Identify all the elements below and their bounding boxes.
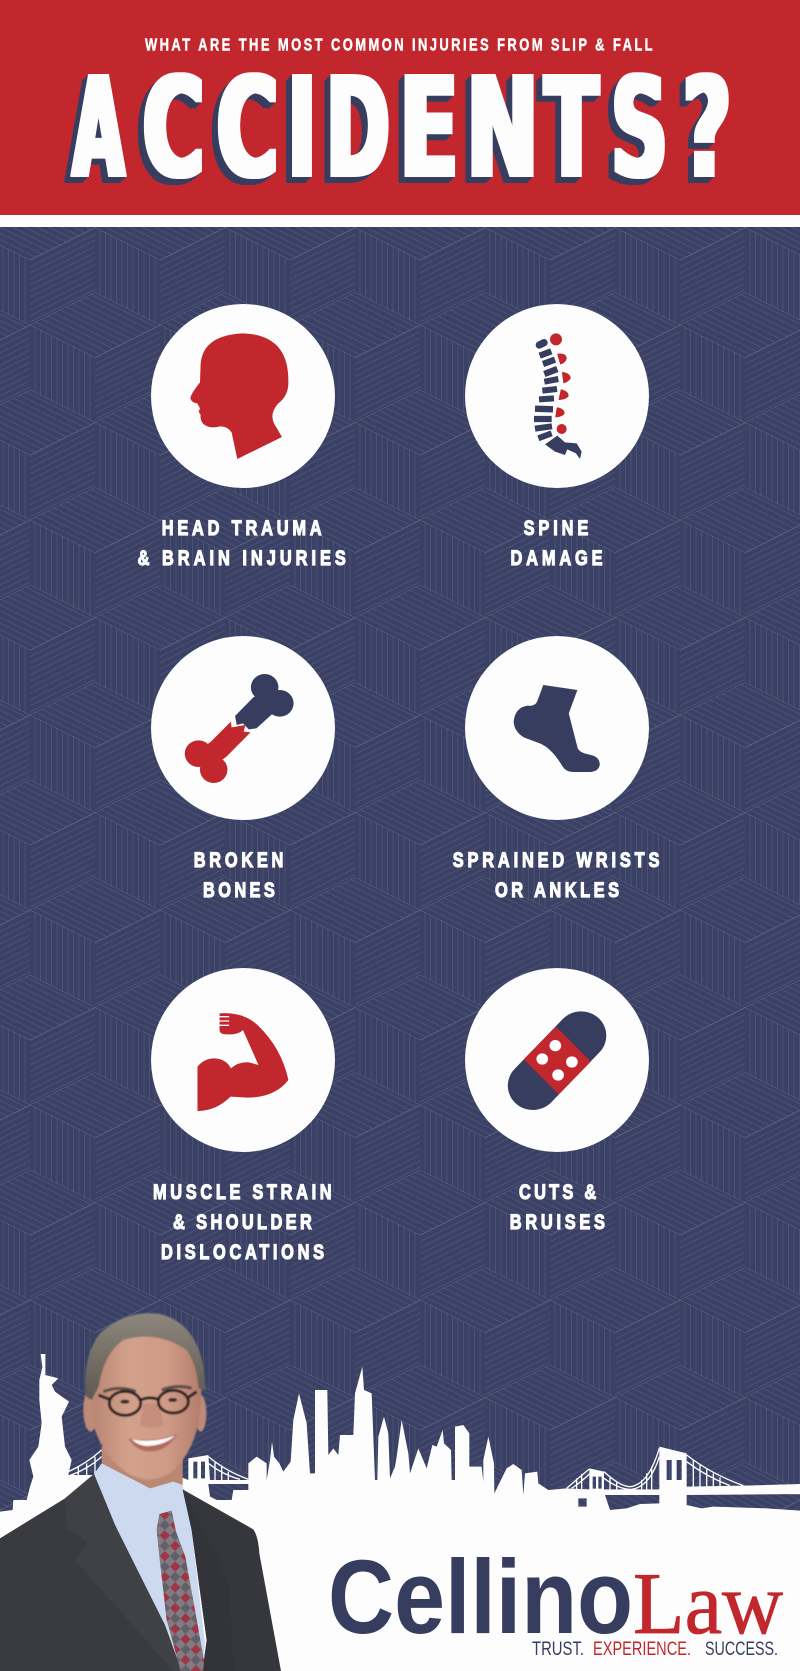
title: accidents: I [288, 49, 316, 210]
label: OR ANKLES [495, 878, 619, 901]
glasses [98, 1390, 197, 1415]
tagline: SUCCESS. [705, 1639, 778, 1660]
icon: flexed arm [198, 1013, 288, 1111]
title: accidents: E [400, 49, 458, 210]
smile [128, 1434, 177, 1451]
label: CUTS & [519, 1180, 597, 1203]
icon: broken bone [185, 674, 294, 783]
panel: cuts and bruises [465, 968, 649, 1233]
panel: head trauma [138, 304, 346, 569]
eyebrows [103, 1387, 192, 1392]
label: BROKEN [194, 848, 283, 871]
label [153, 1180, 332, 1263]
title: accidents: D [326, 48, 390, 209]
label: & BRAIN INJURIES [138, 546, 346, 569]
panel: broken bones [151, 636, 335, 901]
logo: cellino law [328, 1539, 783, 1660]
portrait of attorney [0, 1313, 281, 1671]
label [510, 1180, 605, 1233]
subtitle: WHAT ARE THE MOST COMMON INJURIES FROM SLIP & FALL [145, 36, 653, 55]
wordmark: cellino: Cellino [328, 1539, 633, 1656]
title: accidents: C [143, 49, 204, 210]
new york skyline silhouette [0, 1354, 800, 1671]
head [83, 1313, 206, 1480]
label [194, 848, 283, 901]
label: MUSCLE STRAIN [153, 1180, 332, 1203]
title: accidents [73, 47, 731, 210]
label [510, 516, 603, 569]
panel: sprained wrists or ankles [453, 636, 659, 901]
suit jacket [0, 1474, 281, 1671]
bridge cables [68, 1448, 743, 1489]
label [453, 848, 659, 901]
panel: spine damage [465, 304, 649, 569]
icon: bandage [524, 1027, 591, 1094]
title: accidents: ? [683, 47, 731, 209]
label: DISLOCATIONS [161, 1240, 324, 1263]
label: BRUISES [510, 1210, 605, 1233]
necktie [157, 1511, 204, 1671]
title: accidents: T [545, 48, 598, 209]
label: BONES [203, 878, 275, 901]
panel: muscle strain and shoulder dislocations [151, 968, 335, 1263]
title: accidents: A [73, 47, 124, 209]
icon: spine [534, 334, 582, 459]
label: HEAD TRAUMA [162, 516, 322, 539]
tagline: EXPERIENCE. [593, 1639, 691, 1660]
label [138, 516, 346, 569]
hair [85, 1313, 206, 1400]
eyes [120, 1398, 177, 1404]
title: accidents: C [217, 49, 278, 210]
label: DAMAGE [510, 546, 603, 569]
icon: head [190, 333, 288, 459]
label: & SHOULDER [173, 1210, 312, 1233]
neck [102, 1447, 183, 1493]
shirt [94, 1463, 205, 1671]
tagline: TRUST. [532, 1639, 584, 1660]
label: SPINE [524, 516, 588, 539]
tagline [532, 1639, 778, 1660]
title: accidents: N [467, 49, 538, 210]
icon: foot [514, 685, 600, 772]
header band [0, 0, 800, 215]
wordmark: law: Law [633, 1556, 783, 1653]
label: SPRAINED WRISTS [453, 848, 659, 871]
title: accidents: S [611, 48, 668, 209]
